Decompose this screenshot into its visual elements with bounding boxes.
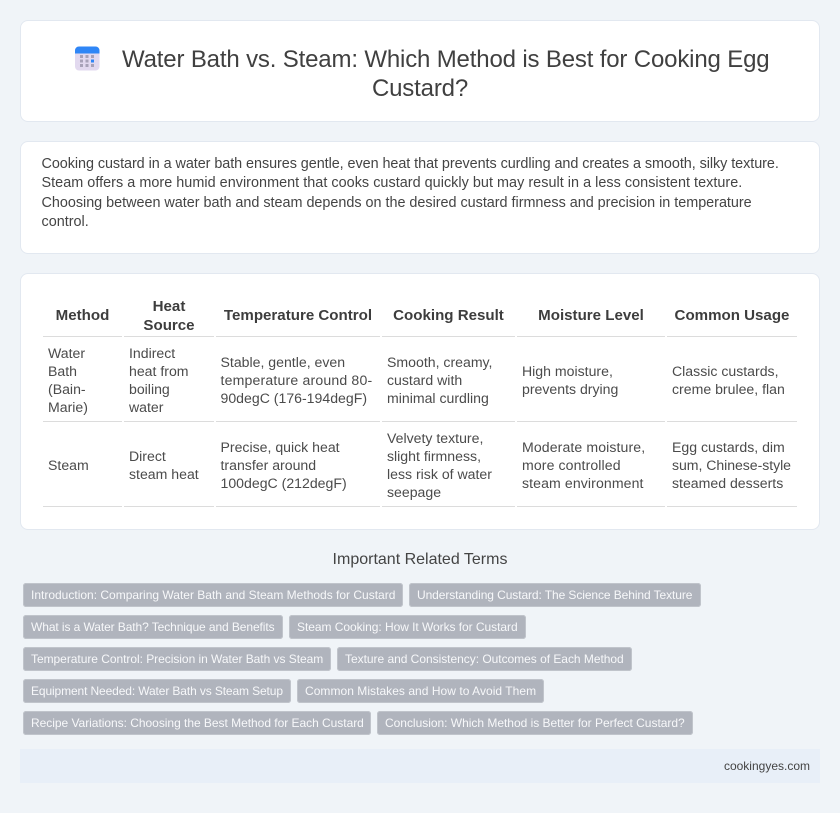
table row: steam: Direct [129, 448, 166, 464]
table row: water bath: Classic custards, [672, 363, 779, 379]
table row: water bath: Indirect [129, 345, 175, 361]
table row: steam: Steam [48, 457, 89, 473]
table header row: Source [143, 317, 195, 334]
related terms heading: Important Related Terms [333, 551, 507, 568]
panel: comparison table [20, 273, 820, 530]
table row: water bath: 90degC (176-194degF) [220, 390, 367, 406]
table row: steam: Precise, quick heat [220, 439, 340, 455]
table row: water bath: Marie) [48, 399, 88, 415]
table row: steam: steam heat [129, 466, 199, 482]
table row: water bath: custard with [387, 372, 462, 388]
table header row: Method [56, 307, 109, 324]
table row: steam: Egg custards, dim [672, 439, 785, 455]
table row: steam: Moderate moisture, [522, 439, 645, 455]
related terms tags: Texture and Consistency: Outcomes of Each Method [345, 652, 624, 666]
table row: steam: slight firmness, [387, 448, 481, 464]
table row: water bath: water [129, 399, 163, 415]
icon: calendar [75, 46, 100, 70]
table row: steam: 100degC (212degF) [220, 475, 347, 491]
table header row: Common Usage [675, 307, 789, 324]
panel: introduction [20, 141, 820, 254]
table header row: Heat [153, 298, 185, 315]
table row: water bath: temperature around 80- [220, 372, 372, 388]
table header row: Temperature Control [224, 307, 372, 324]
table row: water bath: Water [48, 345, 85, 361]
related terms tags: Understanding Custard: The Science Behind Texture [417, 588, 692, 602]
table row: water bath: Bath [48, 363, 77, 379]
panel: title header [20, 20, 820, 122]
intro text: control. [42, 214, 89, 230]
table header row [56, 298, 789, 334]
table row: water bath: boiling [129, 381, 170, 397]
table row: steam: Velvety texture, [387, 430, 483, 446]
related terms tags [23, 583, 701, 735]
related terms tags: What is a Water Bath? Technique and Benefits [31, 620, 275, 634]
intro text [42, 156, 779, 230]
table row: steam: seepage [387, 484, 441, 500]
table row: water bath: Smooth, creamy, [387, 354, 492, 370]
footer source: cookingyes.com [724, 759, 810, 773]
table header row: Cooking Result [393, 307, 504, 324]
title [122, 46, 769, 102]
related terms tags: Recipe Variations: Choosing the Best Method for Each Custard [31, 716, 364, 730]
intro text: Steam offers a more humid environment that cooks custard quickly but may result in a less consistent texture. [42, 175, 742, 191]
related terms tags: Common Mistakes and How to Avoid Them [305, 684, 536, 698]
table row: steam: more controlled [522, 457, 621, 473]
table row: water bath: creme brulee, flan [672, 381, 785, 397]
intro text: Choosing between water bath and steam depends on the desired custard firmness and precision in temperature [42, 194, 752, 210]
title: Water Bath vs. Steam: Which Method is Best for Cooking Egg [122, 46, 769, 73]
title: Custard? [372, 75, 468, 102]
related terms tags: Conclusion: Which Method is Better for Perfect Custard? [385, 716, 685, 730]
table row: steam: sum, Chinese-style [672, 457, 791, 473]
related terms tags: Steam Cooking: How It Works for Custard [297, 620, 518, 634]
related terms tags: Introduction: Comparing Water Bath and Steam Methods for Custard [31, 588, 395, 602]
intro text: Cooking custard in a water bath ensures gentle, even heat that prevents curdling and creates a smooth, silky texture. [42, 156, 779, 172]
table row: water bath: Stable, gentle, even [220, 354, 345, 370]
table row: steam: transfer around [220, 457, 316, 473]
related terms tags: Equipment Needed: Water Bath vs Steam Setup [31, 684, 283, 698]
table row: water bath [48, 345, 785, 415]
table row: steam [48, 430, 791, 500]
table row: water bath: (Bain- [48, 381, 86, 397]
table header row: Moisture Level [538, 307, 644, 324]
related terms tags: Temperature Control: Precision in Water Bath vs Steam [31, 652, 323, 666]
table row: water bath: minimal curdling [387, 390, 489, 406]
table row: water bath: prevents drying [522, 381, 618, 397]
table row: steam: less risk of water [387, 466, 492, 482]
table row: steam: steamed desserts [672, 475, 783, 491]
footer bar [20, 749, 820, 783]
table row: water bath: heat from [129, 363, 189, 379]
table row: water bath: High moisture, [522, 363, 613, 379]
table row: steam: steam environment [522, 475, 644, 491]
